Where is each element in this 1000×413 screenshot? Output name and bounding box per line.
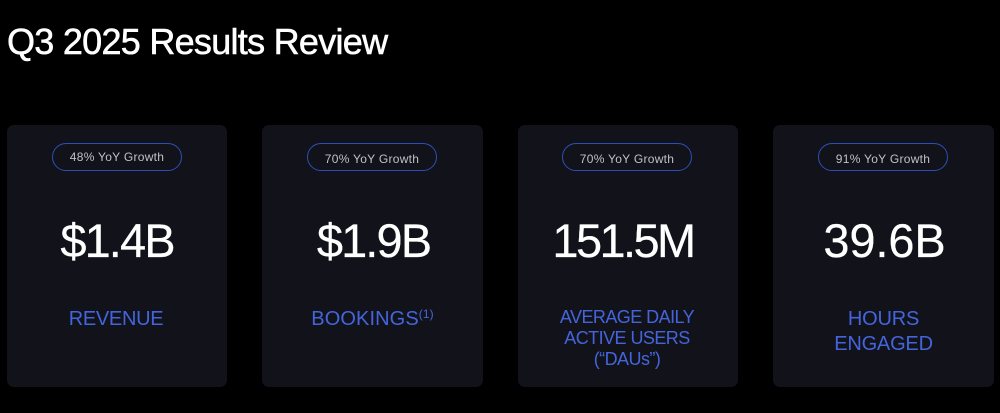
metric label: daily active users: ACTIVE USERS [564,328,690,348]
metric value: hours engaged: 39.6B [823,214,946,267]
growth badge: daily active users [562,143,692,171]
metric label: hours engaged: ENGAGED [834,333,933,355]
metric label: daily active users: (“DAUs”) [594,349,660,369]
growth badge: revenue [52,143,182,171]
growth badge: bookings: 70% YoY Growth [325,152,419,166]
title: Q3 2025 Results Review [7,21,387,62]
metric value: bookings: $1.9B [317,214,430,267]
metric label: daily active users: AVERAGE DAILY [560,307,694,327]
panel: daily active users [518,125,738,387]
panel: revenue [7,125,227,387]
metric label: daily active users [560,307,694,369]
growth badge: hours engaged [818,143,948,171]
panel: hours engaged [773,125,994,387]
growth badge: hours engaged: 91% YoY Growth [836,152,930,166]
metric label: bookings: BOOKINGS(1) [311,307,434,330]
panel: bookings [262,125,483,387]
growth badge: bookings [307,143,437,171]
growth badge: revenue: 48% YoY Growth [70,150,164,164]
metric value: daily active users: 151.5M [552,214,694,267]
metric value: revenue: $1.4B [60,214,174,267]
metric label: hours engaged: HOURS [848,308,919,330]
metric label: revenue: REVENUE [69,308,163,330]
growth badge: daily active users: 70% YoY Growth [580,152,674,166]
metric label: hours engaged [834,308,933,355]
